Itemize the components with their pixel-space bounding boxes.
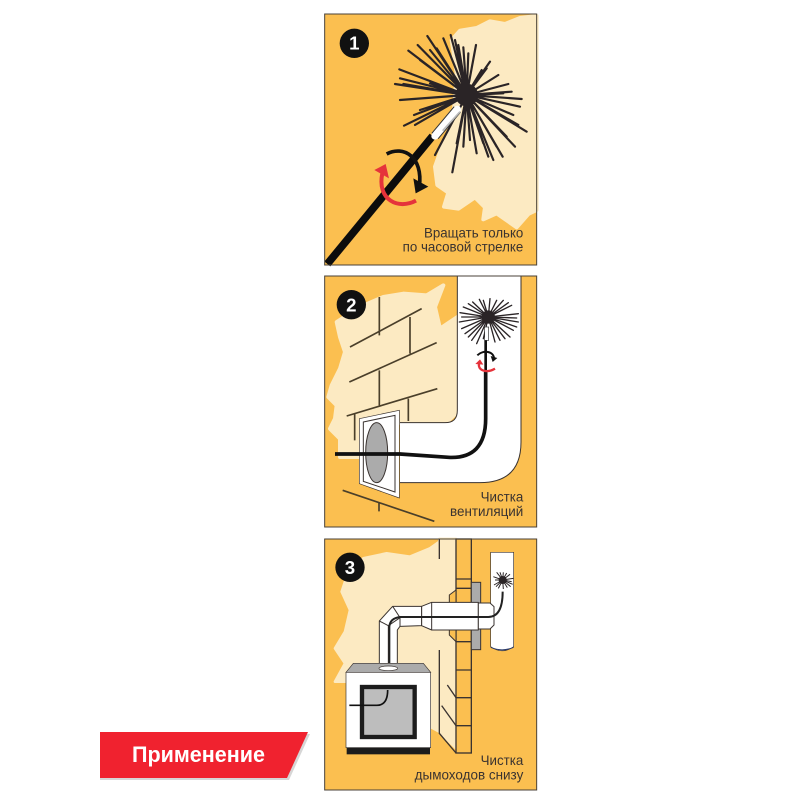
rotation arrows — [475, 352, 497, 371]
cable — [335, 372, 486, 457]
red label: application — [100, 732, 310, 780]
number badge 2 — [337, 290, 366, 319]
duct outline — [400, 276, 521, 483]
brush bristles — [395, 35, 527, 172]
brick wall — [439, 539, 471, 753]
panel 2: ventilation cleaning — [325, 276, 537, 527]
caption 3: дымоходов снизу — [415, 766, 523, 782]
number badge 1 — [340, 29, 369, 58]
white flue — [491, 552, 514, 651]
wall collar — [449, 582, 481, 650]
caption 1 — [403, 224, 524, 255]
paint splash background — [335, 539, 456, 748]
red rotation arrow — [374, 164, 416, 204]
stovepipe — [379, 602, 494, 668]
white duct — [400, 276, 521, 483]
brush ferrule — [435, 109, 460, 136]
brick lines — [343, 297, 437, 521]
caption 1: по часовой стрелке — [403, 239, 524, 255]
caption 1: Вращать только — [424, 224, 524, 240]
small brush in flue — [493, 572, 513, 589]
paint splash background — [328, 285, 457, 457]
panel 1: rotate clockwise — [325, 14, 537, 265]
caption 2: вентиляций — [450, 503, 523, 519]
red label: application: Применение — [132, 742, 265, 767]
caption 2 — [450, 488, 524, 519]
stove — [346, 663, 431, 754]
number badge 3: 3 — [345, 557, 355, 578]
brush rod — [327, 136, 433, 264]
number badge 2: 2 — [346, 294, 357, 315]
caption 3 — [415, 752, 524, 782]
caption 3: Чистка — [481, 752, 524, 768]
number badge 1: 1 — [349, 33, 360, 54]
number badge 3 — [335, 553, 365, 582]
cable through flue — [389, 592, 503, 668]
small brush — [459, 299, 518, 372]
panel 3: chimney cleaning from below — [325, 539, 537, 790]
vent plate — [359, 410, 399, 498]
caption 2: Чистка — [481, 488, 524, 504]
black rotation arrow — [387, 151, 428, 193]
paint splash background — [435, 16, 537, 227]
